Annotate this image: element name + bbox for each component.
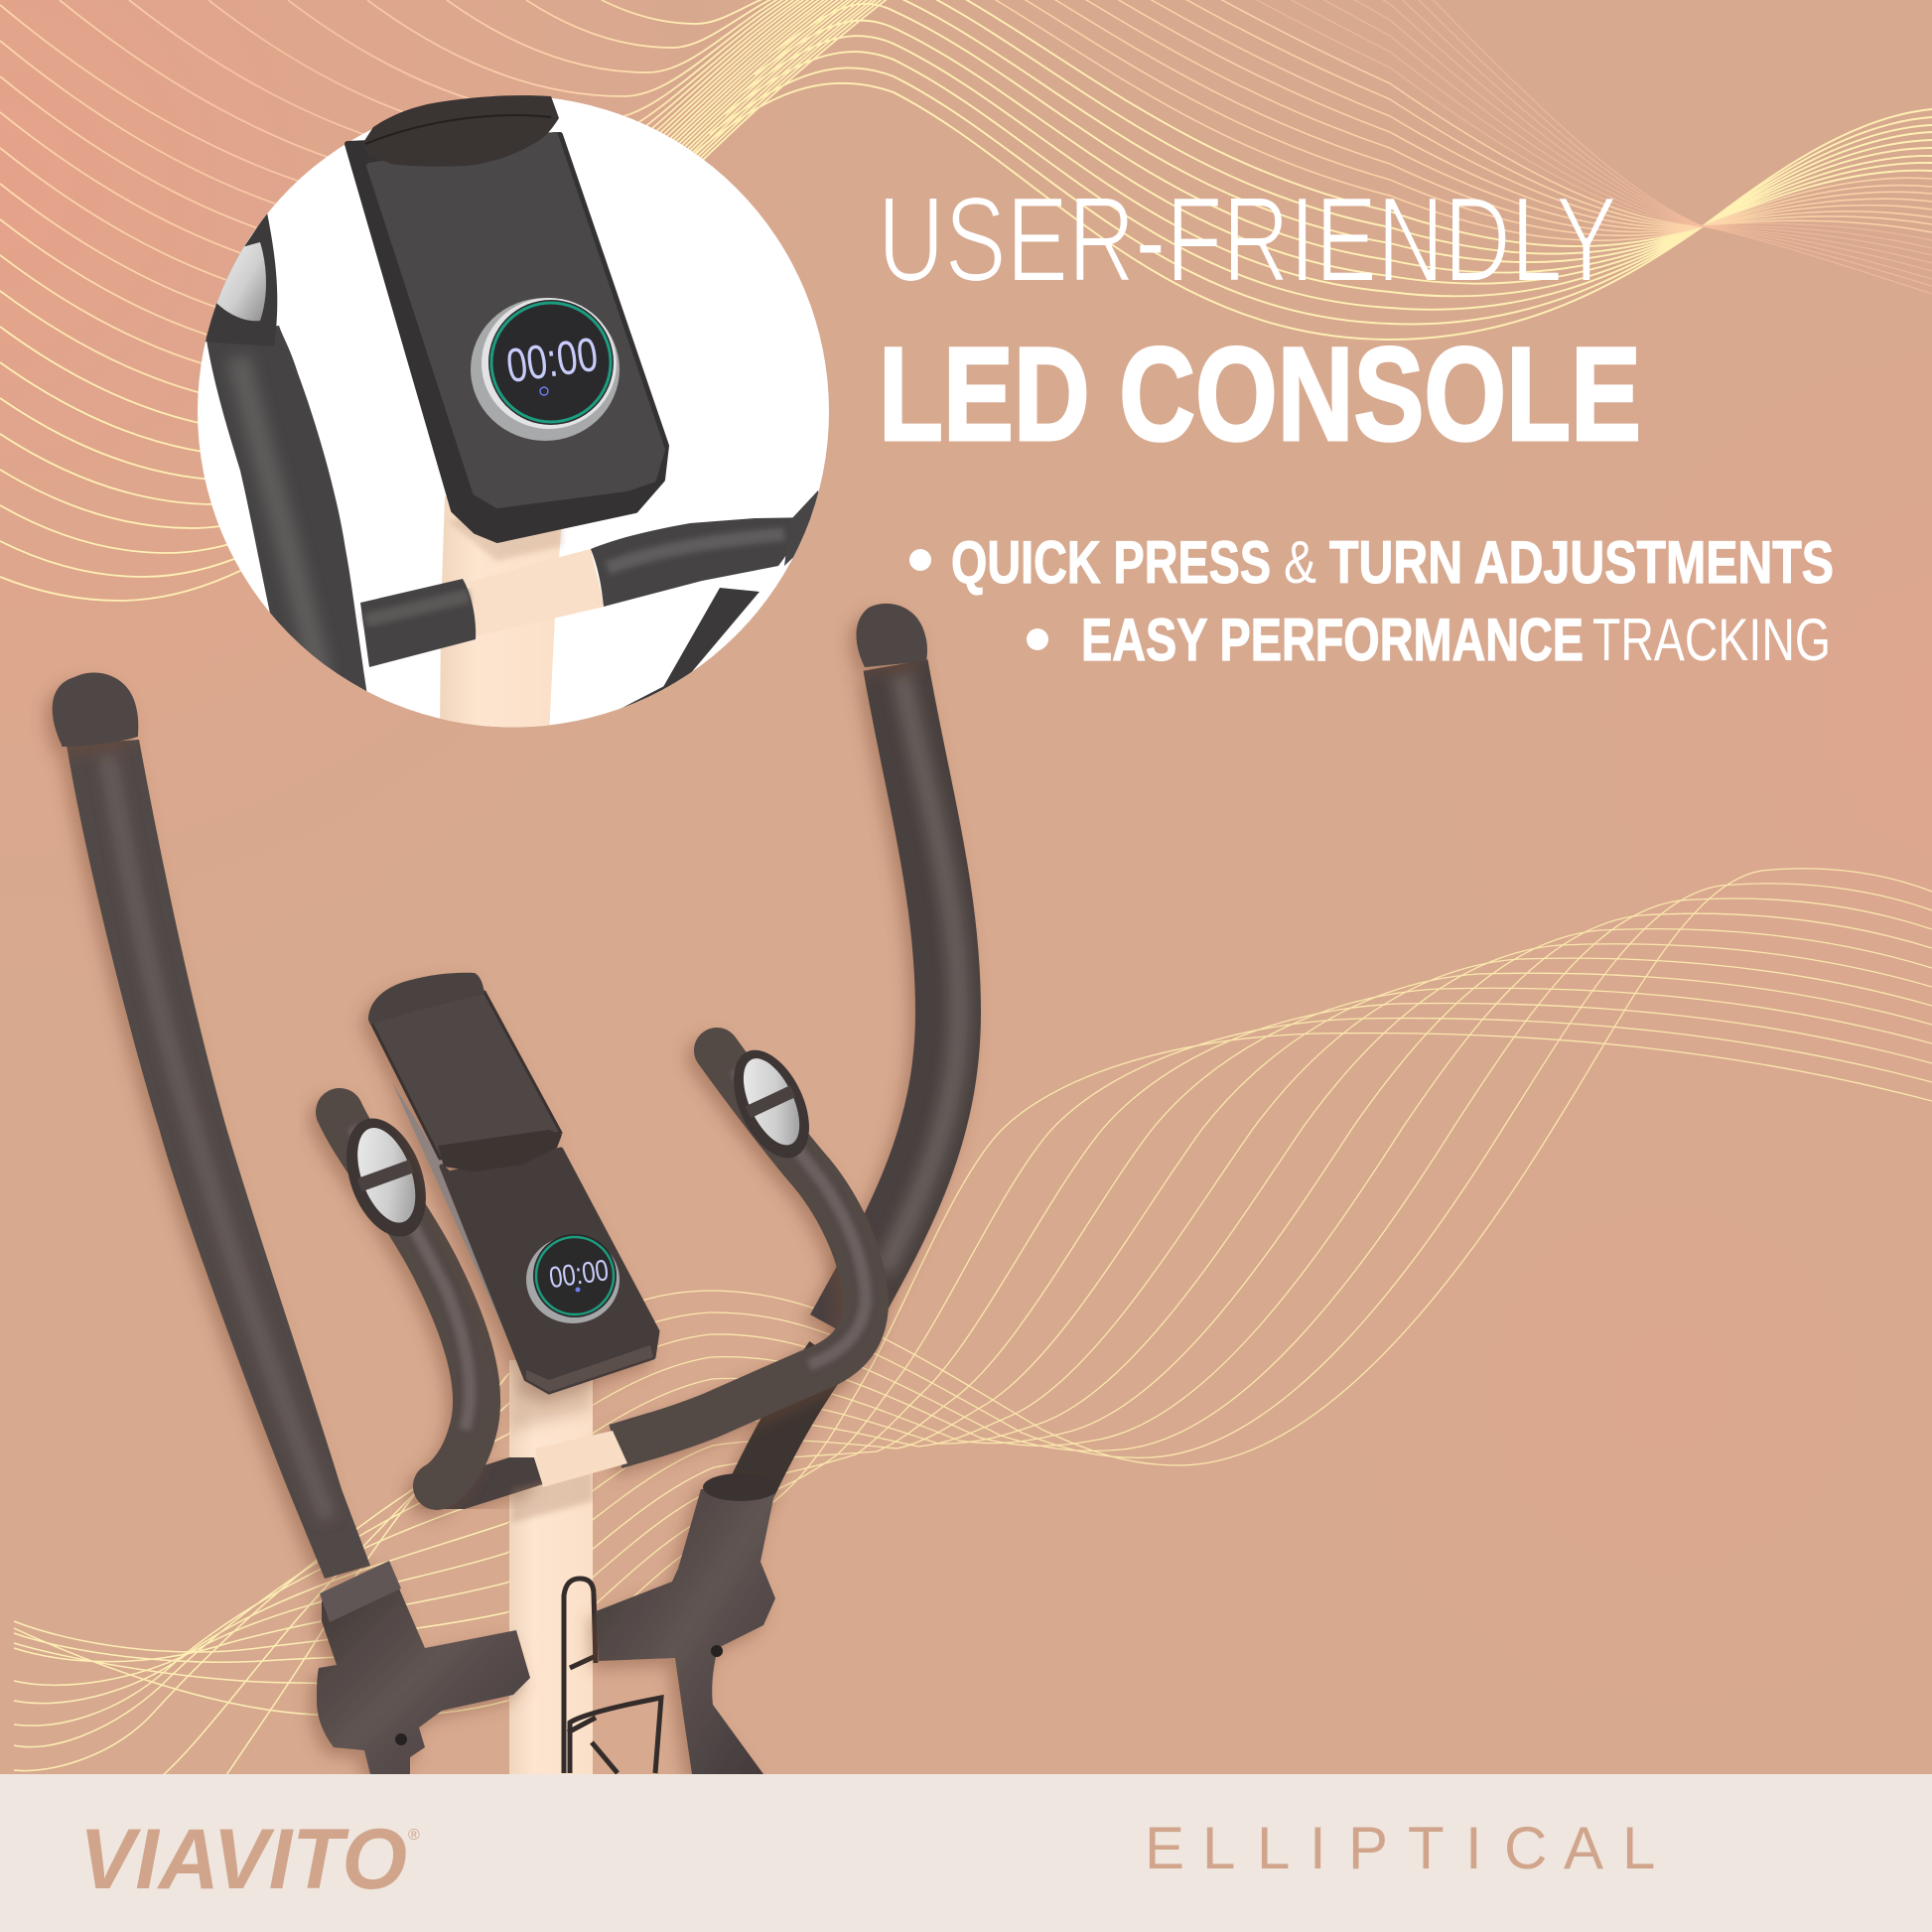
console lower bevel xyxy=(526,1345,653,1392)
inset column xyxy=(440,496,564,735)
console digits: 00:00 xyxy=(547,1254,611,1295)
product: right handgrip xyxy=(616,1050,866,1447)
product: right handle end cap xyxy=(856,604,927,667)
console lower panel xyxy=(442,1150,657,1392)
inset grip button housing xyxy=(204,212,277,346)
inset console panel face xyxy=(369,135,662,505)
inset white disc xyxy=(198,95,829,727)
inset column shadow xyxy=(451,518,565,562)
text: tracking: TRACKING xyxy=(1592,607,1831,673)
product: right grip button xyxy=(718,1038,825,1170)
text: quick press: QUICK PRESS xyxy=(951,529,1271,596)
inset tee bar xyxy=(554,549,605,618)
product: right long handle xyxy=(747,665,959,1499)
product: left handgrip xyxy=(340,1112,477,1486)
product: left handle end cap xyxy=(53,672,138,747)
console top clip xyxy=(368,973,484,1025)
right joint screw xyxy=(711,1645,723,1657)
product: left bar grip xyxy=(437,1467,537,1499)
inset left bar grip xyxy=(360,579,476,667)
wave lines: top right, peach set xyxy=(894,0,1932,240)
console display dial xyxy=(526,1234,620,1323)
product: left lower joint xyxy=(317,1561,530,1774)
inset silver button xyxy=(216,242,266,321)
product: left grip button xyxy=(332,1107,441,1248)
product: console xyxy=(368,973,657,1392)
console lower clip xyxy=(438,1130,562,1172)
inset far tube xyxy=(784,490,818,566)
product: column shadow below console xyxy=(509,1360,593,1432)
inset right bar grip xyxy=(591,517,814,607)
footer band xyxy=(0,1774,1932,1932)
product: tee bar xyxy=(535,1431,627,1487)
product: centre column xyxy=(509,1360,593,1774)
bullet line 1 xyxy=(909,529,1834,596)
logo: Viavito: VIAVITO xyxy=(79,1812,407,1907)
inset circle: console close-up xyxy=(198,95,829,740)
console green ring xyxy=(536,1237,614,1314)
product: left long handle xyxy=(67,740,370,1579)
product: right lower joint xyxy=(596,1473,778,1774)
logo: Viavito: ® xyxy=(408,1827,420,1844)
bullet line 2 xyxy=(1027,607,1831,673)
wave lines: bottom left fan xyxy=(14,1375,507,1787)
inset lower rods xyxy=(663,588,759,687)
bullet dot 1 xyxy=(909,549,931,571)
inset clipped tubes xyxy=(204,212,826,740)
left joint collar xyxy=(320,1561,401,1622)
inset console top clip xyxy=(362,95,559,167)
heading: LED console: LED CONSOLE xyxy=(879,321,1641,469)
inset digits: 00:00 xyxy=(503,329,601,393)
console back panel xyxy=(370,992,561,1159)
wave lines: top right, cream set xyxy=(695,0,1932,340)
inset clock icon xyxy=(540,387,548,395)
product: bottle cage xyxy=(564,1579,661,1773)
heading: user-friendly: USER-FRIENDLY xyxy=(878,172,1617,307)
footer label: Elliptical: ELLIPTICAL xyxy=(1145,1815,1655,1881)
inset green ring xyxy=(491,303,611,422)
text: ampersand: & xyxy=(1284,529,1316,596)
wave lines: top left fan xyxy=(0,0,898,601)
right joint collar xyxy=(703,1473,778,1501)
left joint screw xyxy=(395,1733,407,1745)
product: tee bar shadow xyxy=(511,1467,593,1523)
text: easy performance: EASY PERFORMANCE xyxy=(1081,607,1584,673)
wave lines: top right, faded set xyxy=(894,0,1932,294)
wave lines: lower right ribbon xyxy=(507,869,1932,1701)
inset display dial xyxy=(471,298,620,441)
console side strip xyxy=(392,1082,549,1392)
console indicator dot xyxy=(576,1287,580,1293)
inset console panel outer xyxy=(347,135,666,540)
bullet dot 2 xyxy=(1027,628,1048,650)
inset left grip tube xyxy=(206,326,367,695)
